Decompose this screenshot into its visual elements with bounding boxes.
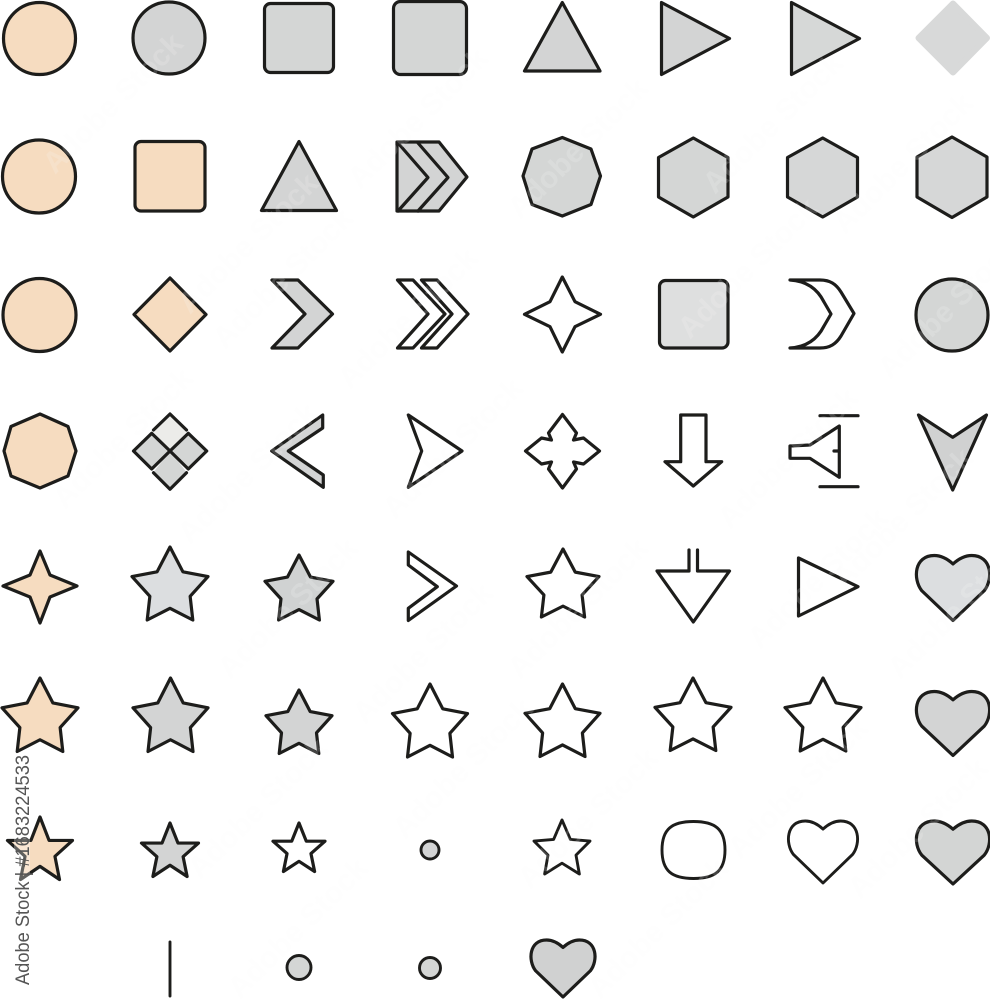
icon: outline right triangle bbox=[798, 558, 858, 616]
icon: grey star bbox=[266, 690, 332, 754]
watermarks: Adobe Stock bbox=[332, 242, 485, 395]
icon: outline heart bbox=[788, 821, 858, 883]
icon: grey square bbox=[264, 4, 334, 72]
watermarks: Adobe Stock bbox=[672, 192, 825, 345]
icon: grey hexagon bbox=[788, 138, 858, 217]
icon: grey dot bbox=[420, 958, 440, 978]
icon: outline star bbox=[527, 549, 599, 617]
watermarks: Adobe Stock bbox=[172, 167, 325, 320]
row 2 bbox=[2, 137, 987, 218]
watermarks: Adobe Stock bbox=[827, 442, 980, 595]
icon: grey heart bbox=[531, 940, 595, 997]
icon: left chevron bbox=[272, 415, 323, 487]
icon: grey star bbox=[133, 678, 208, 752]
icon: peach star bbox=[2, 678, 78, 752]
watermarks: Adobe Stock bbox=[212, 532, 365, 685]
icon: outline star bbox=[655, 678, 731, 750]
row 1 bbox=[4, 2, 987, 74]
watermarks: Adobe Stock bbox=[722, 712, 875, 865]
icon: light grey heart bbox=[916, 556, 990, 620]
icon: light grey star bbox=[132, 547, 208, 620]
icon: grey star bbox=[142, 823, 198, 876]
row 8 bbox=[170, 940, 595, 997]
icon: peach circle bbox=[2, 140, 76, 213]
icon: peach square bbox=[135, 142, 205, 211]
icon: four-part diamond bbox=[134, 414, 207, 489]
icon: grey star bbox=[265, 555, 333, 620]
watermarks: Adobe Stock bbox=[512, 742, 665, 895]
icon: filled triple chevron bbox=[397, 142, 467, 211]
icon: small grey dot bbox=[421, 841, 439, 859]
icon: peach diamond bbox=[134, 278, 206, 351]
icon: outline arrowhead bbox=[408, 415, 462, 487]
icon: grey heart bbox=[916, 821, 990, 884]
icon: vertical line bbox=[169, 942, 171, 996]
icon: grey circle bbox=[133, 2, 205, 74]
icon: peach star bbox=[8, 817, 72, 880]
row 3 bbox=[3, 277, 988, 352]
icon: grey circle bbox=[916, 279, 988, 351]
icon: peach circle bbox=[4, 2, 76, 74]
row 4 bbox=[4, 414, 986, 490]
icon: peach octagon bbox=[4, 414, 76, 488]
vertical stock credit: Adobe Stock | #1683224533 bbox=[13, 755, 34, 985]
icon: outline down triangle arrow bbox=[657, 550, 730, 622]
icon: outline four-point star bbox=[524, 277, 600, 352]
watermarks: Adobe Stock bbox=[37, 27, 190, 180]
watermarks: Adobe Stock bbox=[827, 87, 980, 240]
row 6 bbox=[2, 678, 990, 757]
icon: grey hexagon bbox=[658, 138, 728, 217]
watermarks: Adobe Stock bbox=[207, 202, 360, 355]
icon: outline star bbox=[534, 820, 590, 874]
watermarks: Adobe Stock bbox=[502, 72, 655, 225]
icon: outline four-petal cross bbox=[526, 414, 600, 488]
icon: grey right triangle bbox=[662, 2, 730, 74]
icon: borderless grey diamond bbox=[918, 4, 987, 72]
icon: peach circle bbox=[3, 278, 76, 352]
watermarks: Adobe Stock bbox=[347, 577, 500, 730]
icon: outline star bbox=[392, 684, 468, 757]
icon: outline star bbox=[785, 678, 861, 751]
watermarks: Adobe Stock bbox=[172, 397, 325, 550]
icon: grey triangle bbox=[262, 142, 336, 210]
icon: light grey square bbox=[660, 280, 728, 348]
icon: grey right triangle bbox=[792, 2, 860, 74]
icon: outline star bbox=[525, 684, 600, 756]
row 7 bbox=[8, 817, 990, 884]
watermarks: Adobe Stock bbox=[697, 47, 850, 200]
watermarks: Adobe Stock bbox=[377, 372, 530, 525]
watermarks: Adobe Stock bbox=[387, 692, 540, 845]
watermarks: Adobe Stock bbox=[342, 42, 495, 195]
icon: large grey square bbox=[394, 2, 466, 74]
icon: crescent chevron bbox=[790, 280, 854, 348]
icon: grey hexagon bbox=[917, 137, 987, 218]
watermarks: Adobe Stock bbox=[742, 502, 895, 655]
icon: outline star bbox=[273, 823, 325, 872]
icon: grey octagon bbox=[523, 138, 600, 216]
icon: grey chevron bbox=[272, 280, 332, 348]
icon: grey down arrowhead bbox=[918, 415, 986, 490]
row 5 bbox=[3, 547, 990, 623]
watermarks: Adobe Stock bbox=[182, 732, 335, 885]
icon: grey triangle bbox=[524, 2, 600, 71]
icon: grey dot bbox=[287, 956, 311, 980]
icon: outline rounded square bbox=[662, 822, 725, 878]
icon: grey heart bbox=[916, 692, 990, 756]
icon: outline chevron bbox=[408, 552, 456, 620]
watermarks: Adobe Stock bbox=[502, 532, 655, 685]
icon: double outline chevron bbox=[398, 280, 468, 348]
icon: peach four-point star bbox=[3, 551, 77, 623]
watermarks: Adobe Stock bbox=[712, 382, 865, 535]
watermarks: Adobe Stock bbox=[47, 362, 200, 515]
icon: outline down arrow bbox=[665, 415, 722, 486]
icon: funnel between two bars bbox=[790, 416, 858, 487]
